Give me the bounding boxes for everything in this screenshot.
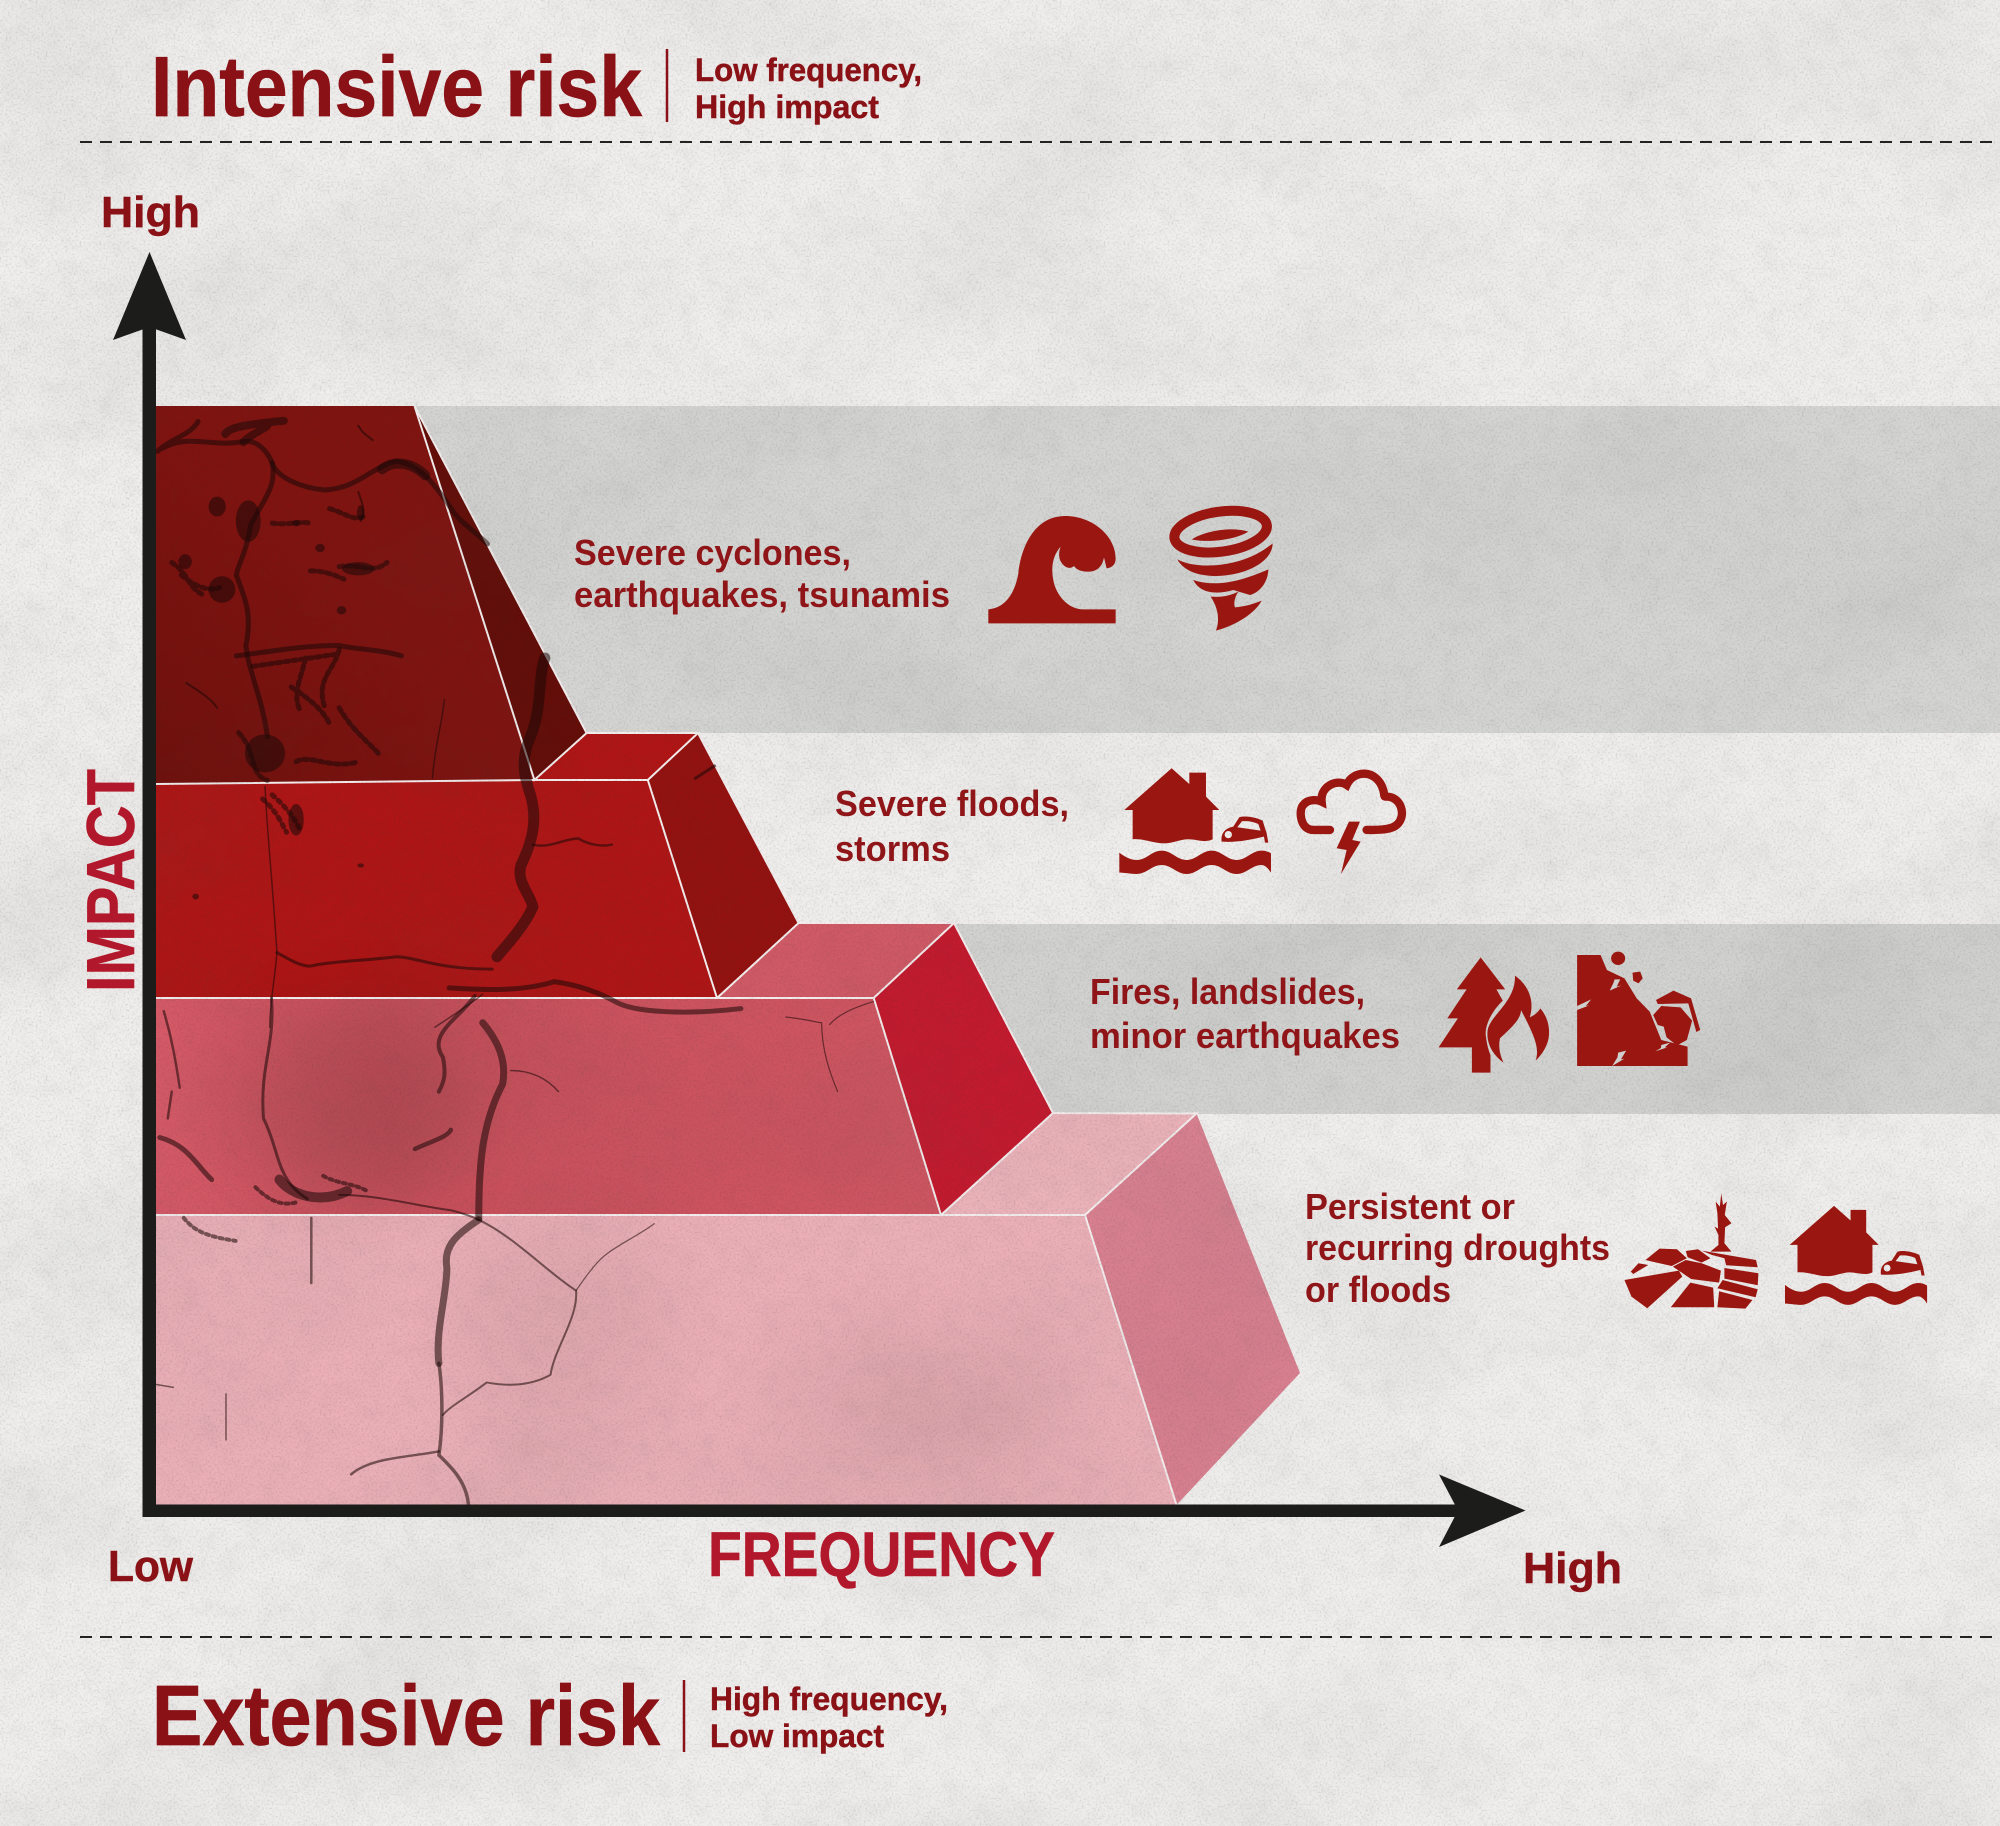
horizontal frequency axis arrow [142,1474,1526,1547]
grey band: intensive hazards row [414,406,2000,733]
icon: storm cloud with lightning [1301,774,1402,874]
block 2: red [156,733,799,998]
label: fires, landslides, minor earthquakes: minor earthquakes [1090,1015,1400,1056]
label: fires, landslides, minor earthquakes [1090,971,1400,1056]
heading: intensive risk: Low frequency, [695,52,922,88]
crack blotches in blocks 1 and 2 [178,497,375,899]
heading: intensive risk: High impact [695,89,879,125]
axis labels: Low [108,1542,194,1591]
label: persistent droughts or floods [1305,1186,1610,1310]
icon: tsunami wave [988,516,1116,623]
label: persistent droughts or floods: or floods [1305,1269,1451,1310]
label: persistent droughts or floods: recurring droughts [1305,1227,1610,1268]
icon: drought cracked earth with dead tree [1624,1193,1758,1309]
grey band: fires and landslides row [950,924,2000,1114]
shaded patches on blocks [250,1000,1040,1480]
label: severe floods, storms: Severe floods, [835,783,1069,824]
block 3: medium pink-red [156,923,1053,1215]
icon: tree and fire [1439,957,1549,1073]
label: persistent droughts or floods: Persistent or [1305,1186,1515,1227]
label: severe floods, storms [835,783,1069,869]
label: severe cyclones, earthquakes, tsunamis: Severe cyclones, [574,532,851,573]
block 4: extensive, pale pink [156,1113,1300,1505]
axis labels: FREQUENCY [708,1520,1055,1590]
icon: flooded house and car, second [1785,1206,1927,1305]
wall cracks across blocks 3 and 4 [156,996,873,1505]
label: fires, landslides, minor earthquakes: Fires, landslides, [1090,971,1365,1012]
axis labels: IMPACT [73,769,149,992]
axis labels [73,188,1622,1593]
heading: intensive risk: Intensive risk [151,40,643,135]
block 1: dark maroon [156,406,587,784]
heading: extensive risk: Extensive risk [152,1669,661,1764]
bottom dashed divider [80,1636,2000,1638]
heading: extensive risk: High frequency, [710,1681,948,1717]
axis labels: High [101,188,200,237]
label: severe cyclones, earthquakes, tsunamis: earthquakes, tsunamis [574,574,950,615]
icon: landslide [1577,952,1700,1066]
block edge highlights [156,406,1196,1505]
label: severe floods, storms: storms [835,828,950,869]
heading: extensive risk: Low impact [710,1718,884,1754]
risk staircase blocks [156,406,1300,1505]
icon: tornado [1172,505,1273,631]
icon: flooded house and car [1119,768,1271,874]
axis labels: High [1523,1544,1622,1593]
wall cracks across blocks 1 and 2 [157,421,741,1027]
label: severe cyclones, earthquakes, tsunamis [574,532,950,615]
vertical impact axis arrow [113,252,186,1517]
top dashed divider [80,141,2000,143]
